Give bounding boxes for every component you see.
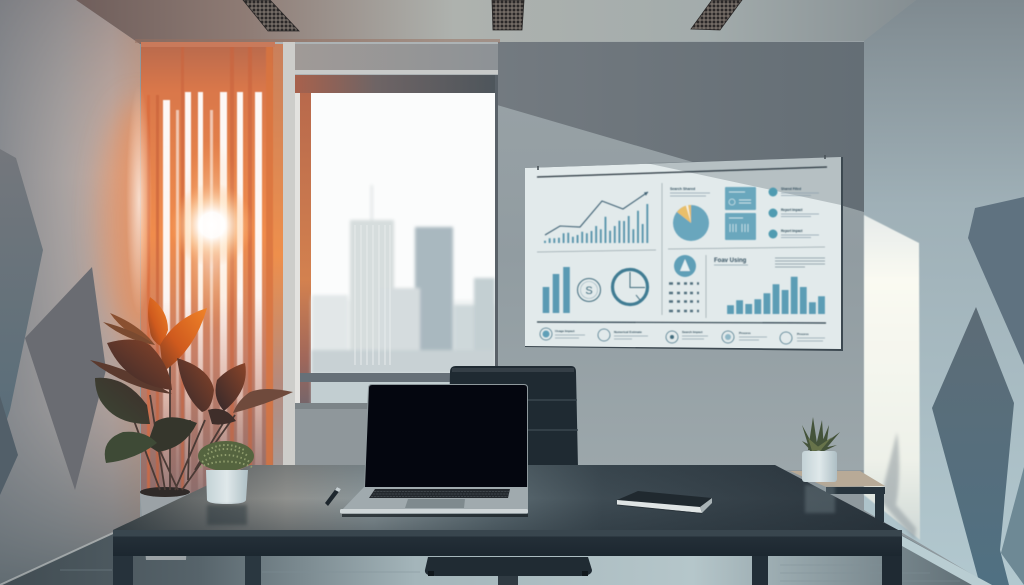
plant leaves — [90, 297, 293, 463]
office chair back — [448, 366, 578, 468]
baseboard left — [0, 533, 113, 585]
right wall geometric shapes — [932, 197, 1024, 585]
desk top — [113, 465, 902, 532]
center wall — [497, 40, 864, 470]
floor — [0, 533, 992, 585]
desk front edge — [113, 530, 902, 556]
side table — [790, 471, 885, 522]
footer icons and captions: Numerical Estimate — [614, 330, 642, 334]
baseboard right — [902, 536, 992, 585]
pie chart heading: Search Shared — [670, 187, 695, 191]
desk legs — [113, 540, 133, 585]
pie chart — [673, 205, 709, 241]
poster sheet — [525, 157, 841, 349]
window mullion and sill — [300, 373, 497, 382]
footer icons and captions: Search Impact — [682, 330, 703, 334]
chair base under desk — [425, 557, 592, 585]
small bar chart — [546, 267, 566, 313]
plant stems — [130, 345, 235, 490]
line chart with bars — [545, 192, 648, 243]
icon grid — [669, 284, 699, 311]
ceiling vent right — [691, 0, 742, 30]
left wall — [0, 0, 178, 585]
sunlight patch on right wall — [864, 215, 920, 540]
footer icons and captions: Usage Impact — [555, 329, 575, 333]
poster hooks — [538, 155, 825, 170]
footer icons and captions — [540, 328, 825, 344]
curtain — [126, 42, 283, 500]
floor plant — [90, 297, 293, 560]
column chart — [730, 277, 822, 314]
pen — [325, 487, 341, 506]
footer icons and captions: Process — [739, 331, 751, 335]
ceiling — [76, 0, 916, 44]
teal info cards — [725, 187, 756, 240]
left wall geometric shapes — [0, 149, 106, 495]
triangle badge — [674, 255, 696, 277]
numbered list: Report Impact — [781, 208, 803, 212]
laptop screen — [364, 384, 528, 488]
ceiling vent left — [243, 0, 299, 31]
right wall — [864, 0, 1024, 585]
trackpad — [405, 499, 465, 508]
chart description — [775, 258, 825, 267]
laptop base — [340, 487, 528, 512]
clock icon — [612, 270, 648, 304]
desk plant in pot — [198, 441, 254, 525]
column chart heading: Foav Using — [714, 258, 747, 264]
wall poster — [525, 155, 843, 351]
floor planks — [60, 565, 960, 581]
laptop — [340, 384, 528, 517]
dollar icon — [578, 278, 600, 302]
side plant in pot — [802, 417, 840, 513]
desk — [113, 465, 902, 585]
numbered list: Shared Filled — [781, 187, 801, 191]
ceiling vent center — [492, 0, 524, 30]
sun glow — [170, 140, 254, 330]
keyboard — [369, 489, 510, 498]
city skyline — [311, 185, 496, 405]
footer icons and captions: Process — [797, 332, 809, 336]
notebook — [617, 491, 712, 514]
window glass — [310, 93, 496, 405]
dollar icon: S — [585, 285, 593, 297]
numbered list: Report Impact — [781, 229, 803, 233]
numbered list — [768, 187, 819, 238]
window — [275, 42, 498, 467]
